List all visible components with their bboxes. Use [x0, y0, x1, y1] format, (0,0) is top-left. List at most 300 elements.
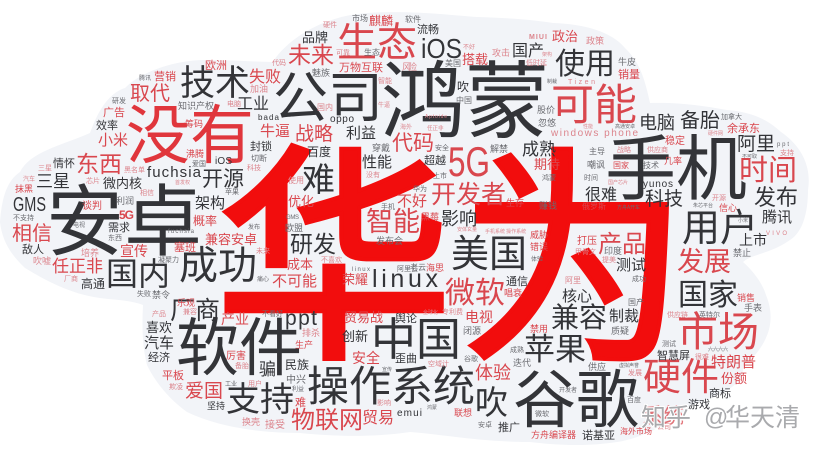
small gray words: 腾讯 — [139, 73, 151, 82]
medium red words: 厉害 — [226, 347, 246, 362]
small pink words: 支持 — [780, 148, 794, 158]
medium black words: GMS — [13, 194, 46, 216]
small gray words: 加拿大 — [721, 112, 742, 122]
small gray words: 爱国 — [192, 159, 206, 169]
medium black words: yunos — [643, 179, 673, 190]
medium red words: 不好 — [397, 190, 427, 211]
word: 战略: 战略 — [295, 119, 333, 146]
small gray words: 百度 — [627, 395, 641, 405]
medium red words: 俄罗斯 — [582, 201, 606, 212]
small pink words: Tizen — [568, 79, 595, 86]
small gray words: 不支持 — [13, 213, 34, 223]
medium black words: 电脑 — [639, 109, 675, 135]
medium black words: ppt — [285, 307, 317, 330]
small gray words: 手表 — [744, 301, 762, 314]
small pink words: 黑名单 — [124, 165, 145, 175]
word: 国内: 国内 — [106, 249, 170, 295]
small pink words: 险 — [408, 60, 417, 73]
word: 鸿蒙: 鸿蒙 — [381, 35, 549, 156]
word: 爱国: 爱国 — [185, 376, 223, 403]
word: iOS: iOS — [421, 33, 462, 64]
word: 代码: 代码 — [392, 127, 434, 157]
small pink words: 加油 — [250, 82, 268, 95]
watermark: 知乎 @华天清: 华天清 — [725, 398, 800, 434]
small gray words: 宣传 — [382, 366, 392, 373]
word: 产品: 产品 — [598, 224, 646, 259]
small gray words: 赚钱 — [539, 199, 557, 212]
small gray words: 利益 — [292, 384, 304, 393]
medium black words: 吹 — [457, 78, 469, 95]
medium red words: 特朗普 — [711, 351, 756, 372]
small pink words: 低时延 — [526, 58, 547, 68]
medium red words: 产业 — [221, 309, 249, 329]
medium black words: 商标 — [709, 385, 731, 401]
medium red words: 任正非 — [52, 252, 103, 277]
small pink words: MIUI — [529, 34, 547, 41]
word: 市场: 市场 — [677, 298, 759, 358]
small pink words: 性能 — [583, 123, 593, 130]
small pink words: 提美 — [602, 255, 616, 265]
small gray words: 手机 — [381, 202, 395, 212]
small pink words: 攻击 — [492, 46, 510, 59]
word: 东西: 东西 — [76, 145, 122, 179]
watermark: 知乎 @华天清 — [641, 398, 800, 434]
word: 美国: 美国 — [451, 223, 527, 278]
small gray words: 印度 — [604, 244, 622, 257]
small gray words: 老云 — [410, 262, 426, 273]
small gray words: 技术 — [643, 160, 659, 171]
medium black words: 成熟 — [522, 135, 556, 160]
medium black words: 百度 — [307, 143, 331, 160]
word: 体验: 体验 — [475, 359, 511, 385]
medium red words: 5G — [119, 208, 134, 222]
small gray words: 鸿蒙 — [542, 173, 556, 183]
medium red words: 方舟编译器 — [531, 428, 576, 441]
small gray words: 主导 — [589, 146, 605, 157]
medium black words: 情怀 — [53, 155, 75, 171]
medium red words: 乐观 — [177, 296, 195, 309]
word: 5G: 5G — [448, 138, 490, 185]
small gray words: 鸿蒙 — [427, 404, 437, 411]
medium black words: 核心 — [562, 285, 592, 306]
medium black words: bada — [258, 113, 280, 122]
small pink words: 吹嘘 — [33, 254, 51, 267]
small gray words: 中兴 — [286, 371, 306, 386]
small pink words: 产品 — [152, 309, 166, 319]
medium red words: 期待 — [534, 154, 560, 173]
small gray words: 制裁 — [547, 78, 557, 85]
word: 取代: 取代 — [130, 77, 170, 106]
small pink words: 汽车 — [23, 174, 35, 183]
medium red words: 稳定 — [665, 132, 685, 147]
word: 支持: 支持 — [226, 372, 294, 421]
small pink words: 欺凌 — [169, 382, 183, 392]
small gray words: 成功 — [632, 274, 646, 284]
small gray words: 上市 — [433, 171, 447, 181]
small gray words: GMS — [286, 215, 299, 221]
medium red words: 牛逼 — [260, 120, 290, 141]
small pink words: 阿里 — [565, 275, 581, 286]
medium red words: 生产 — [295, 338, 313, 351]
medium black words: 品牌 — [302, 27, 328, 46]
medium black words: 很难 — [585, 181, 617, 205]
small gray words: 测试 — [662, 339, 676, 349]
small pink words: 架构 — [542, 51, 552, 58]
medium black words: 喜欢 — [146, 317, 172, 336]
small pink words: 国产芯片 — [608, 179, 628, 186]
small gray words: 发布会 — [376, 234, 403, 247]
medium red words: 销量 — [618, 66, 640, 82]
medium red words: 不可能 — [272, 270, 317, 291]
medium black words: 国产 — [512, 37, 544, 61]
small gray words: 谷歌 — [464, 354, 478, 364]
medium red words: 错误 — [530, 240, 548, 253]
small pink words: 芯片 — [86, 176, 100, 186]
small pink words: 备胎 — [235, 361, 249, 371]
medium black words: fuchsia — [147, 164, 202, 181]
small gray words: 研发 — [112, 96, 126, 106]
medium red words: 营销 — [154, 68, 176, 84]
medium black words: 流畅 — [417, 21, 439, 37]
small pink words: 手机系统 操作系统 — [485, 228, 526, 235]
medium black words: 骗 — [259, 355, 276, 380]
medium red words: 概率 — [193, 212, 217, 229]
medium black words: 经济 — [148, 349, 170, 365]
small pink words: 不喜欢 — [321, 255, 342, 265]
small gray words: 安卓 — [478, 420, 492, 430]
medium black words: 测试 — [616, 254, 646, 275]
small gray words: 解禁 — [490, 142, 508, 155]
small pink words: 供应商 — [647, 145, 668, 155]
medium red words: 唱衰 — [504, 286, 522, 299]
small gray words: 不看好 — [262, 309, 283, 319]
small pink words: 可靠 — [336, 48, 350, 58]
word: 开发者: 开发者 — [431, 175, 506, 211]
small gray words: 华为 — [413, 184, 427, 194]
small gray words: 切断 — [251, 153, 267, 164]
medium red words: 兼容安卓 — [205, 229, 257, 248]
medium black words: 智慧屏 — [657, 347, 690, 363]
medium red words: 国家 — [613, 160, 629, 171]
small gray words: 小米 — [738, 217, 748, 224]
word: 国家: 国家 — [678, 270, 738, 314]
small pink words: 牛逼 — [378, 100, 390, 109]
medium red words: 塞班 — [174, 239, 196, 255]
small gray words: 不可取 — [742, 153, 757, 160]
word: 硬件: 硬件 — [643, 346, 719, 401]
small pink words: 硬件网 — [708, 130, 723, 137]
word: 公司: 公司 — [273, 53, 383, 133]
medium red words: 海思 — [426, 261, 444, 274]
small pink words: 没有 — [366, 170, 380, 180]
medium red words: 打压 — [577, 232, 597, 247]
small gray words: 闭源 — [463, 324, 481, 337]
medium red words: 筹码 — [185, 117, 203, 130]
small pink words: 用户 — [248, 379, 262, 389]
word: 生态: 生态 — [337, 10, 417, 68]
small gray words: 穿戴 — [372, 141, 390, 154]
medium red words: 抹黑 — [15, 182, 33, 195]
small pink words: 接受 — [265, 416, 285, 431]
small pink words: 不好 — [463, 42, 475, 51]
medium black words: 歪曲 — [395, 350, 417, 366]
small gray words: 安全 — [435, 143, 449, 153]
small gray words: 知识产权 — [178, 99, 214, 112]
word: 没有: 没有 — [126, 85, 254, 177]
small gray words: 苹果 — [225, 187, 239, 197]
small gray words: 凝聚力 — [158, 255, 179, 265]
small gray words: 软件 — [405, 14, 421, 25]
medium red words: 优化 — [288, 191, 314, 210]
word: 可能: 可能 — [551, 71, 637, 133]
medium black words: 民族 — [285, 356, 309, 373]
small pink words: 安体玄量 — [457, 226, 477, 233]
small gray words: 成熟 — [510, 345, 524, 355]
word: linux: linux — [372, 265, 438, 293]
medium black words: 制裁 — [609, 305, 639, 326]
medium red words: 安全 — [352, 348, 380, 368]
small gray words: 时间 — [584, 173, 598, 183]
word: 兼容: 兼容 — [551, 296, 607, 336]
medium red words: 黑莓 — [421, 210, 439, 223]
watermark: 知乎 @华天清: 知乎 — [641, 398, 691, 434]
medium red words: 系统 — [642, 400, 684, 430]
medium black words: 腾讯 — [762, 206, 792, 227]
medium red words: 万物互联 — [339, 59, 383, 75]
small pink words: 厂商 — [64, 274, 78, 284]
medium black words: 性能 — [362, 151, 392, 172]
word: 物联网: 物联网 — [291, 400, 363, 435]
medium red words: 贸易战 — [344, 307, 383, 326]
word: 智能: 智能 — [366, 200, 420, 239]
main word: 华为 — [222, 142, 670, 362]
medium black words: 诺基亚 — [582, 427, 615, 443]
small pink words: 首发权 — [175, 179, 190, 186]
medium red words: 贸易 — [362, 404, 394, 428]
medium black words: 备胎 — [680, 104, 720, 133]
small gray words: linux — [352, 267, 370, 273]
small gray words: 魅族 — [312, 66, 330, 79]
medium black words: 游戏 — [688, 396, 710, 412]
medium red words: 几率 — [664, 154, 682, 167]
small gray words: 开发者 — [559, 385, 577, 394]
small gray words: 发布 — [248, 222, 260, 231]
medium red words: 广告 — [103, 104, 125, 120]
small gray words: 生态 — [364, 47, 380, 58]
medium black words: 通信 — [506, 273, 528, 289]
small gray words: 东西 — [108, 233, 122, 243]
small gray words: 国产 — [628, 297, 644, 308]
word: 研发: 研发 — [290, 225, 336, 259]
small pink words: 换壳 — [242, 415, 260, 428]
small pink words: 任正非 — [427, 124, 444, 132]
word: 吹: 吹 — [475, 376, 508, 424]
small pink words: 海外 — [400, 122, 412, 131]
medium black words: 三星 — [36, 167, 70, 192]
word: 操作系统: 操作系统 — [307, 353, 475, 414]
medium black words: 上市 — [739, 230, 767, 250]
medium black words: 微内核 — [103, 173, 142, 192]
medium red words: 销售 — [737, 291, 755, 304]
medium red words: 禁用 — [530, 322, 548, 335]
small gray words: ppt — [777, 142, 789, 148]
medium black words: 影响 — [441, 205, 477, 231]
word: 厂商: 厂商 — [170, 291, 220, 327]
small pink words: 战略 — [617, 145, 631, 155]
small gray words: 美国 — [445, 58, 461, 69]
medium black words: 工业 — [237, 90, 269, 114]
small gray words: 体验 — [531, 254, 543, 263]
small gray words: 中国 — [456, 95, 472, 106]
medium black words: 超越 — [424, 152, 446, 168]
small pink words: 甲骨文 — [575, 247, 596, 257]
word: 中国: 中国 — [371, 303, 461, 368]
medium black words: 敌人 — [22, 241, 44, 257]
small gray words: 虚拟声誉 — [619, 362, 639, 369]
medium red words: 难 — [295, 394, 306, 410]
small pink words: 发展 — [628, 368, 642, 378]
small pink words: 影响 — [377, 398, 391, 408]
small pink words: 国内 — [317, 102, 333, 113]
small gray words: 高通安卓 — [615, 123, 635, 130]
small gray words: 工业 — [225, 379, 237, 388]
medium black words: 汽车 — [144, 332, 174, 353]
medium black words: 需求 — [108, 219, 130, 235]
medium red words: 荣耀 — [342, 269, 368, 288]
small gray words: 供应 — [588, 360, 606, 373]
small gray words: 嘲讽 — [587, 158, 605, 171]
word: 技术: 技术 — [180, 55, 250, 106]
watermark: 知乎 @华天清: @ — [704, 404, 728, 431]
word: 未来: 未来 — [288, 36, 334, 70]
small pink words: 开源 — [712, 193, 726, 203]
word: 难: 难 — [302, 153, 335, 201]
small pink words: windows phone — [550, 128, 638, 139]
small gray words: 朱芯平台 — [693, 202, 713, 209]
small pink words: 兼容 — [183, 307, 197, 317]
medium black words: 创新 — [342, 326, 368, 345]
small pink words: 空域计 — [428, 359, 449, 369]
medium red words: 谈判 — [82, 197, 102, 212]
medium black words: 推广 — [498, 419, 520, 435]
medium red words: 成本 — [287, 254, 313, 273]
small gray words: 失败 — [137, 289, 151, 299]
medium black words: 开源 — [202, 163, 244, 193]
small pink words: 专利费 — [442, 307, 463, 317]
medium red words: 电视 — [465, 307, 493, 327]
medium red words: 联想 — [454, 406, 472, 419]
small pink words: 相信 — [140, 188, 154, 198]
small pink words: 培养 — [81, 246, 99, 259]
word: 软件: 软件 — [176, 298, 302, 389]
small gray words: 欧盟 — [285, 221, 303, 234]
medium red words: 宣传 — [120, 241, 148, 261]
word: 相信: 相信 — [12, 217, 52, 246]
word: 发展: 发展 — [677, 240, 731, 279]
small gray words: 股价 — [537, 103, 555, 116]
medium black words: 高通 — [81, 275, 105, 292]
small pink words: 硬件 — [323, 20, 337, 30]
large black keywords — [46, 33, 758, 441]
small gray words: 迭代 — [513, 356, 531, 369]
medium red words: 威胁 — [530, 228, 548, 241]
medium red words: 沸腾 — [186, 147, 204, 160]
medium red words: 搭载 — [462, 49, 488, 68]
small gray words: 方舟A开车 — [617, 204, 640, 211]
small gray words: 英特尔 — [699, 310, 720, 320]
small pink words: 全球化 — [423, 309, 438, 316]
small gray words: 牛皮 — [618, 55, 636, 68]
medium black words: oppo — [330, 114, 354, 125]
word: 安卓: 安卓 — [46, 160, 202, 272]
word: 用户: 用户 — [682, 197, 758, 252]
main word: 华为: 为 — [458, 74, 690, 410]
small pink words: 风 — [402, 60, 411, 73]
medium black words: 阿里 — [737, 129, 775, 156]
medium black words: 架构 — [195, 192, 225, 213]
small pink words: 很难 — [695, 352, 709, 362]
medium black words: 坚持 — [207, 399, 225, 412]
medium black words: iOS — [215, 156, 232, 167]
small pink words: 供应链 — [667, 310, 688, 320]
medium red words: 小米 — [98, 129, 128, 150]
small gray words: 质疑 — [611, 324, 629, 337]
medium red words: 余承东 — [727, 120, 760, 136]
word: 成功: 成功 — [179, 235, 257, 291]
medium red words: 份额 — [721, 368, 747, 387]
small gray words: 忽悠 — [538, 116, 556, 129]
word: 使用: 使用 — [555, 39, 615, 83]
word: 手机: 手机 — [605, 113, 747, 215]
medium black words: 效率 — [96, 117, 118, 133]
small pink words: 使用 — [288, 175, 304, 186]
medium black words: 舆论 — [395, 310, 417, 326]
small pink words: 电脑 — [227, 99, 241, 109]
medium red words: 政治 — [552, 26, 578, 45]
medium black words: 科技 — [645, 184, 683, 211]
small gray words: 微软 — [535, 409, 549, 419]
small gray words: 痛心 — [257, 274, 269, 283]
small pink words: 三星 — [38, 163, 52, 173]
main word: 华为: 华 — [214, 70, 454, 417]
medium red words: 麒麟 — [369, 12, 393, 29]
small gray words: 六六六六 — [708, 346, 728, 353]
small gray words: 禁令 — [152, 288, 170, 301]
small pink words: Aptoide — [425, 114, 447, 120]
word: 苹果: 苹果 — [524, 324, 586, 369]
medium red words: 海外市场 — [620, 426, 652, 437]
medium red words: 失败 — [249, 63, 281, 87]
small pink words: 公司 — [657, 422, 671, 432]
word: 谷歌: 谷歌 — [513, 350, 639, 441]
small pink words: 代码 — [272, 58, 286, 68]
small gray words: 市场 — [352, 13, 368, 24]
medium red words: 信心 — [719, 201, 737, 214]
small gray words: 电视 — [73, 220, 85, 229]
medium red words: 欧洲 — [205, 57, 227, 73]
small pink words: 智能 — [378, 76, 392, 86]
small gray words: 禁止 — [733, 246, 751, 259]
medium red words: 生存 — [506, 196, 524, 209]
medium red words: 平板 — [162, 367, 184, 383]
small pink words: 科技 — [247, 163, 261, 173]
word: 微软: 微软 — [445, 268, 505, 312]
small gray words: 阿里云 — [397, 264, 418, 274]
small pink words: 政策 — [586, 34, 604, 47]
medium black words: emui — [397, 408, 422, 419]
medium black words: 利益 — [346, 122, 376, 143]
small gray words: fuchsia — [168, 229, 195, 235]
